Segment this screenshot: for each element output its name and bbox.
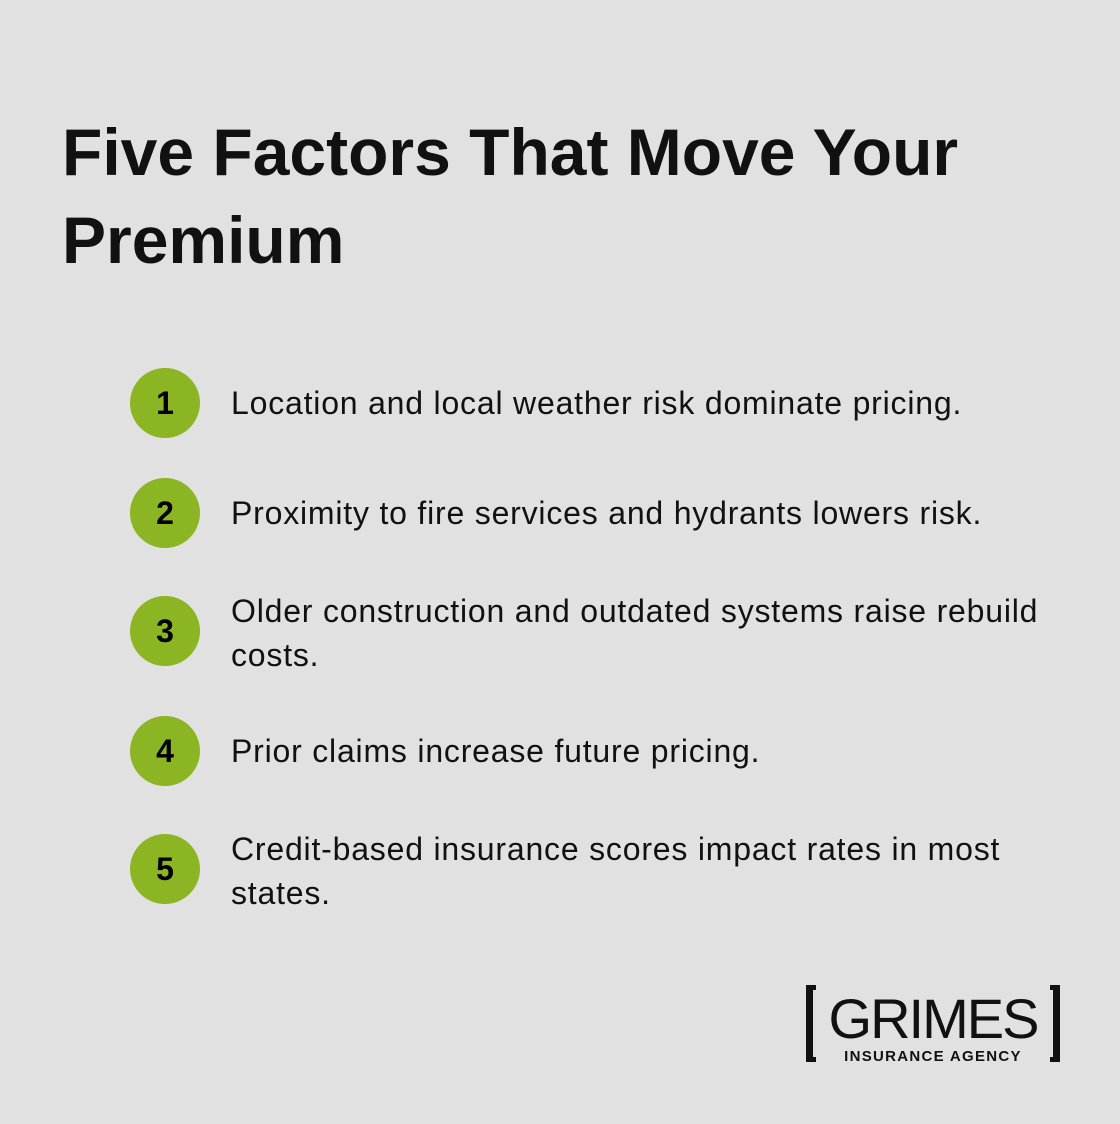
item 4: [130, 716, 760, 786]
item 2: 2: [156, 495, 174, 531]
logo: GRIMES: [829, 987, 1037, 1050]
title: Five Factors That Move Your: [62, 115, 958, 189]
title: Premium: [62, 203, 344, 277]
logo: [806, 985, 1060, 1065]
item 1: 1: [156, 385, 174, 421]
item 1: Location and local weather risk dominate pricing.: [231, 385, 962, 421]
item 4: Prior claims increase future pricing.: [231, 733, 760, 769]
item 1: [130, 368, 962, 438]
item 3: Older construction and outdated systems raise rebuild costs.: [231, 593, 1038, 673]
item 5: 5: [156, 851, 174, 887]
item 5: Credit-based insurance scores impact rates in most states.: [231, 831, 1000, 911]
title: [62, 115, 958, 277]
logo: INSURANCE AGENCY: [844, 1048, 1022, 1065]
item 2: Proximity to fire services and hydrants lowers risk.: [231, 495, 982, 531]
item 2: [130, 478, 982, 548]
item 4: 4: [156, 733, 174, 769]
item 3: 3: [156, 613, 174, 649]
